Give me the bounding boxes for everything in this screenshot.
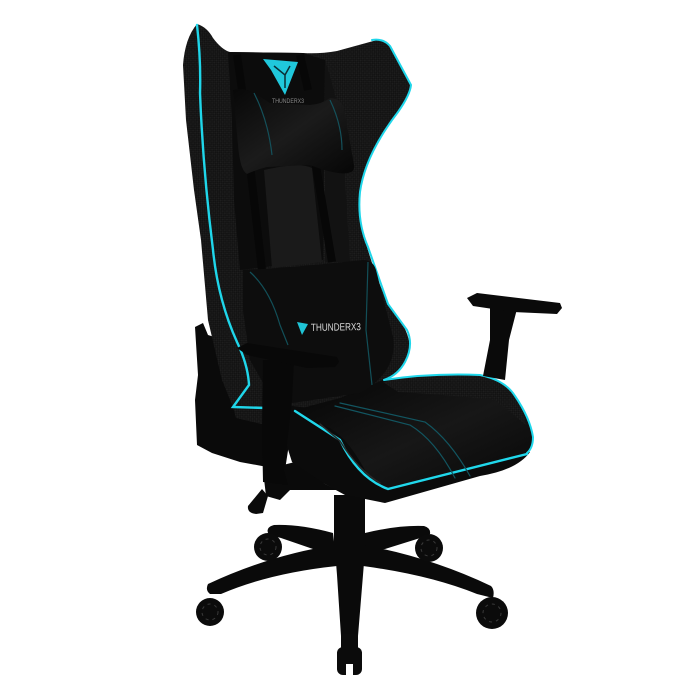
lumbar pillow bbox=[243, 260, 394, 403]
lower seat shell bbox=[285, 405, 530, 503]
lumbar logo bbox=[297, 322, 308, 335]
headrest pillow bbox=[233, 89, 354, 174]
seat stitching bbox=[295, 375, 533, 489]
side adjuster bbox=[195, 323, 295, 470]
back straps bbox=[237, 55, 332, 270]
tilt mechanism and lever bbox=[248, 462, 337, 514]
top logo bbox=[263, 59, 305, 105]
backrest shell bbox=[183, 24, 410, 440]
inner back panel bbox=[228, 52, 325, 270]
lumbar brand text: THUNDERX3 bbox=[311, 321, 361, 334]
base: five-star legs bbox=[207, 495, 494, 636]
casters bbox=[196, 533, 508, 678]
right armrest bbox=[467, 293, 562, 380]
cyan piping on back bbox=[197, 25, 411, 408]
chair illustration bbox=[183, 24, 562, 678]
left armrest bbox=[237, 343, 339, 485]
seat cushion bbox=[291, 374, 533, 488]
gas lift column bbox=[334, 495, 365, 555]
headrest brand text: THUNDERX3 bbox=[272, 99, 305, 105]
seat carbon side panels bbox=[383, 375, 526, 425]
